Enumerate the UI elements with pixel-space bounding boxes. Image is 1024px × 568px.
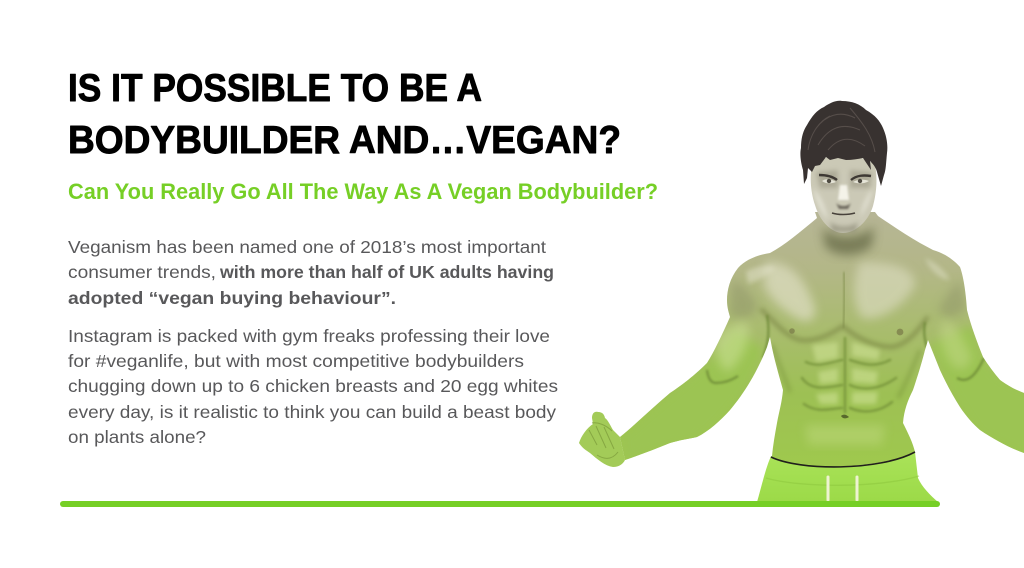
text block: veganism trend: consumer trends,: [68, 262, 216, 282]
text block: instagram question: chugging down up to 6 chicken breasts and 20 egg whites: [68, 376, 558, 396]
subtitle: Can You Really Go All The Way As A Vegan Bodybuilder?: [68, 179, 658, 204]
shorts: [757, 452, 938, 502]
body silhouette: [620, 212, 1024, 466]
title: [68, 67, 621, 162]
head: [811, 155, 876, 233]
title: BODYBUILDER AND…VEGAN?: [68, 119, 621, 162]
text block: instagram question: on plants alone?: [68, 427, 206, 447]
text block: veganism trend: with more than half of UK adults having: [219, 262, 554, 282]
divider bar: [60, 501, 940, 507]
text block: veganism trend: adopted “vegan buying behaviour”.: [68, 288, 396, 308]
muscle shading clipped to body: [620, 226, 1024, 465]
fist: [579, 412, 625, 467]
text block: instagram question: for #veganlife, but with most competitive bodybuilders: [68, 351, 524, 371]
text block: instagram question: Instagram is packed with gym freaks professing their love: [68, 326, 550, 346]
hair: [800, 101, 887, 186]
text block: veganism trend: [68, 237, 554, 308]
hair highlights: [808, 108, 875, 152]
text block: instagram question: [68, 326, 558, 447]
illustration: green-tinted bodybuilder: [579, 101, 1024, 502]
title: IS IT POSSIBLE TO BE A: [68, 67, 482, 110]
text block: veganism trend: Veganism has been named one of 2018’s most important: [68, 237, 546, 257]
text block: instagram question: every day, is it realistic to think you can build a beast body: [68, 402, 556, 422]
